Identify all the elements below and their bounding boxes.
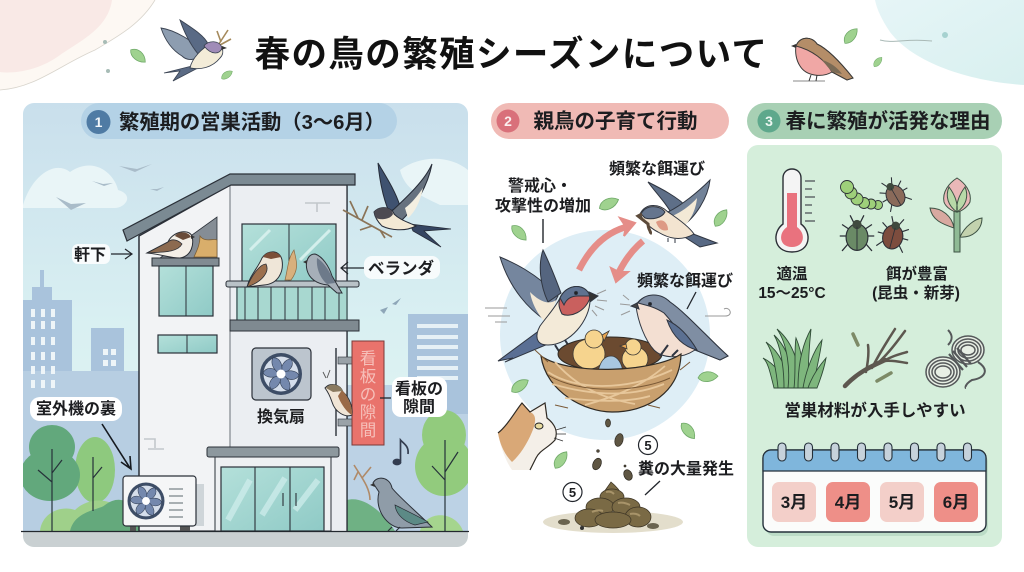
icon: outdoor AC unit bbox=[123, 476, 204, 531]
icon: insects bbox=[840, 173, 914, 253]
month cell: June: 6月 bbox=[943, 493, 969, 512]
arrows: feeding cycle bbox=[579, 218, 643, 282]
heading pill 2: 2 bbox=[504, 113, 512, 129]
text: abundant food: 餌が豊富 bbox=[886, 264, 948, 283]
bird: right parent bbox=[631, 295, 730, 360]
heading pill 2 bbox=[491, 103, 729, 139]
bird: sparrow on eaves bbox=[147, 232, 195, 258]
signboard bbox=[336, 341, 384, 445]
text: abundant food: (昆虫・新芽) bbox=[872, 284, 960, 302]
signboard: 隙 bbox=[360, 403, 376, 422]
ground line bbox=[21, 530, 469, 532]
signboard: 間 bbox=[360, 422, 376, 440]
month cell: March bbox=[772, 482, 816, 522]
heading pill 1: 1 bbox=[95, 114, 103, 130]
text: temperature: 適温 bbox=[776, 264, 808, 283]
heading pill 1: 繁殖期の営巣活動（3〜6月） bbox=[119, 111, 385, 134]
panel 1: nesting sites bbox=[20, 103, 1002, 547]
label: behind outdoor unit: 室外機の裏 bbox=[36, 399, 116, 418]
icon: thermometer bbox=[776, 169, 815, 252]
icon: small robin, title right bbox=[791, 26, 884, 81]
label: ventilation fan: 換気扇 bbox=[257, 407, 305, 426]
labels panel 2: 攻撃性の増加 bbox=[495, 196, 591, 215]
bird: sparrow on balcony bbox=[247, 250, 297, 287]
background decoration: pink corner bbox=[0, 0, 155, 90]
title: 春の鳥の繁殖シーズンについて bbox=[255, 34, 768, 74]
balcony railing and slab bbox=[237, 287, 347, 320]
bird: swallow carrying twig bbox=[343, 163, 451, 247]
label: eaves bbox=[72, 244, 132, 264]
month cell: April: 4月 bbox=[835, 493, 861, 512]
upper left window bbox=[159, 266, 213, 316]
droppings bbox=[591, 419, 634, 482]
background decoration: blue corner bbox=[875, 0, 1024, 85]
signboard: の bbox=[360, 386, 376, 404]
bird: parent flying with worm bbox=[638, 180, 717, 247]
canopy and entrance bbox=[207, 447, 339, 531]
small window bbox=[158, 335, 217, 353]
labels panel 2: 頻繁な餌運び bbox=[637, 271, 733, 290]
icon: swallow with twig, title left bbox=[128, 20, 234, 81]
bird: sparrow at signboard bbox=[323, 370, 352, 416]
heading pill 3: 春に繁殖が活発な理由 bbox=[786, 109, 990, 133]
panel 2: parent bird behaviour bbox=[485, 103, 734, 533]
icon: grass bbox=[763, 329, 826, 388]
heading pill 3 bbox=[747, 103, 1002, 139]
bird: grey bird on balcony bbox=[303, 254, 342, 293]
icon: cat bbox=[498, 403, 566, 470]
eaves nest and ledge bbox=[160, 217, 217, 258]
icon: music note bbox=[392, 440, 408, 465]
chicks bbox=[573, 330, 648, 372]
labels panel 2: 糞の大量発生 bbox=[638, 460, 734, 478]
panel background bbox=[23, 103, 468, 547]
leaves bbox=[509, 195, 730, 471]
label: behind outdoor unit bbox=[30, 397, 131, 469]
icon: dropping pile bbox=[543, 482, 683, 533]
label: veranda: ベランダ bbox=[368, 258, 434, 278]
text: nesting materials: 営巣材料が入手しやすい bbox=[784, 400, 966, 420]
heading pill 1 bbox=[81, 103, 397, 139]
signboard: 看 bbox=[360, 349, 376, 368]
labels panel 2: 頻繁な餌運び bbox=[609, 159, 705, 178]
label: eaves: 軒下 bbox=[74, 246, 106, 264]
text: abundant food bbox=[872, 264, 960, 302]
nest bbox=[535, 350, 690, 412]
labels panel 2: 警戒心・ bbox=[508, 176, 572, 195]
label: veranda bbox=[341, 256, 440, 279]
label: signboard gap: 看板の bbox=[395, 380, 443, 398]
text: temperature bbox=[758, 264, 826, 302]
bird: pigeon with twig bbox=[354, 465, 432, 531]
bird: alert parent bbox=[485, 250, 630, 362]
labels panel 2 bbox=[495, 159, 734, 502]
balcony window bbox=[242, 224, 336, 284]
icon: calendar bbox=[763, 443, 988, 536]
text: temperature: 15〜25°C bbox=[758, 285, 826, 302]
trees and bushes bbox=[20, 410, 473, 531]
month cell: June bbox=[934, 482, 978, 522]
label: signboard gap bbox=[380, 377, 447, 417]
icon: ventilation fan bbox=[252, 348, 311, 400]
icon: rope bbox=[926, 330, 985, 388]
heading pill 2: 親鳥の子育て行動 bbox=[534, 110, 698, 133]
panel 3: why spring bbox=[747, 103, 1002, 547]
heading pill 3: 3 bbox=[765, 113, 773, 129]
background circle bbox=[500, 230, 710, 440]
icon: twig bbox=[845, 329, 907, 386]
month cell: May bbox=[880, 482, 924, 522]
signboard: 板 bbox=[360, 367, 377, 386]
labels panel 2: 5 bbox=[569, 485, 576, 500]
labels panel 2: 5 bbox=[644, 438, 652, 453]
nest inner bbox=[558, 337, 662, 371]
month cell: April bbox=[826, 482, 870, 522]
label: signboard gap: 隙間 bbox=[403, 398, 435, 416]
icon: new bud bbox=[930, 178, 982, 252]
card background bbox=[747, 145, 1002, 547]
scenery: sky and city bbox=[23, 159, 468, 547]
building bbox=[123, 174, 384, 531]
month cell: May: 5月 bbox=[889, 493, 915, 512]
month cell: March: 3月 bbox=[781, 493, 807, 512]
